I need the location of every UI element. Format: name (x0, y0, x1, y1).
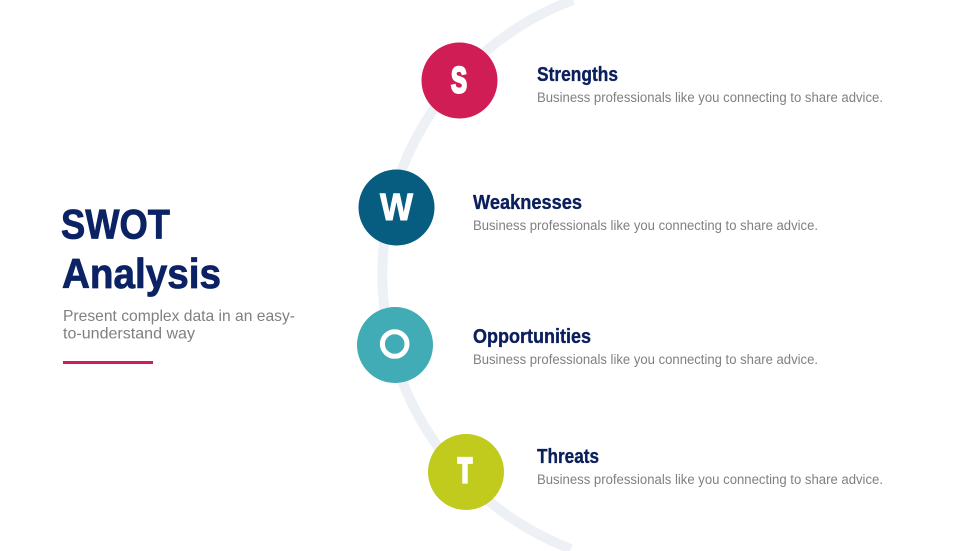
item: threats (428, 434, 883, 510)
subtitle: to-understand way (63, 326, 195, 342)
threats description: Business professionals like you connecting to share advice. (537, 472, 883, 487)
subtitle (63, 308, 295, 342)
red accent line (63, 361, 153, 364)
subtitle: Present complex data in an easy- (63, 308, 295, 325)
icon: T circle: T (458, 452, 472, 490)
threats heading: Threats (537, 446, 599, 468)
item: strengths (422, 42, 883, 118)
icon: W circle (358, 170, 434, 246)
title: SWOT (61, 200, 170, 248)
icon: S circle: S (451, 60, 467, 100)
weaknesses description: Business professionals like you connecting to share advice. (473, 218, 818, 233)
icon: W circle: W (380, 187, 413, 229)
strengths heading: Strengths (537, 64, 618, 86)
left heading panel (61, 200, 295, 364)
opportunities description: Business professionals like you connecting to share advice. (473, 352, 818, 367)
icon: S circle (422, 42, 498, 118)
title (61, 200, 221, 297)
item: weaknesses (358, 170, 818, 246)
strengths description: Business professionals like you connecting to share advice. (537, 90, 883, 105)
item: opportunities (357, 307, 818, 383)
icon: O circle (357, 307, 433, 383)
background arc (382, 0, 573, 549)
weaknesses heading: Weaknesses (473, 192, 582, 214)
icon: T circle (428, 434, 504, 510)
title: Analysis (62, 250, 221, 297)
opportunities heading: Opportunities (473, 326, 591, 348)
